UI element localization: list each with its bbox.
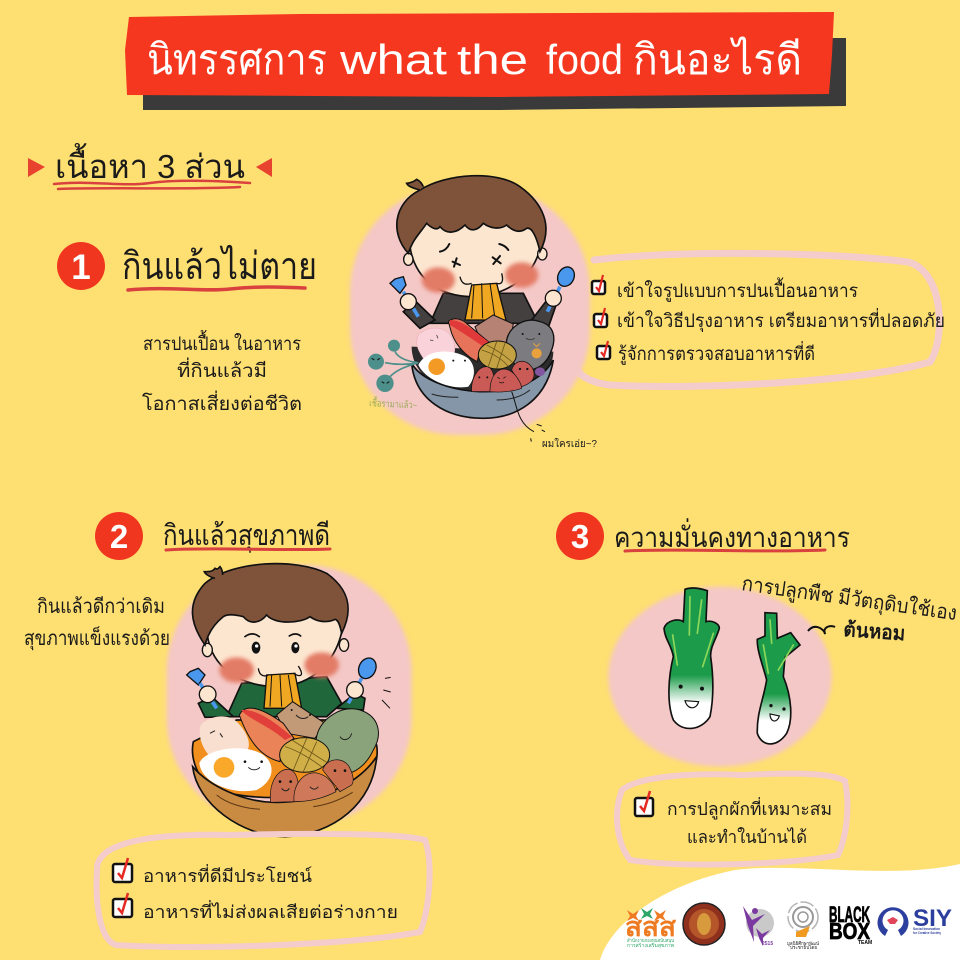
checklist: section 2 [113,858,398,922]
section 1 heading: กินแล้วไม่ตาย [122,245,317,288]
logo: black box team: BOX [829,918,871,944]
logo: black box team: TEAM [858,940,872,946]
checklist: section 3: และทำในบ้านได้ [687,827,807,847]
logo: foundation rings [787,902,819,950]
logo: SSS: สำนักงานกองทุนสนับสนุน [627,938,674,944]
heading: three parts [28,143,272,189]
label: spring onion: ต้นหอม [843,618,906,645]
section 3 heading [556,512,850,560]
label: fungus: เชื้อรามาแล้ว~ [369,396,418,412]
illustration: sick boy with bowl [350,176,590,442]
logo: black box team: BLACK [829,902,870,927]
title banner: กินอะไรดี [633,36,802,83]
section 2 heading: 2 [110,518,128,555]
section 3 heading: 3 [571,518,589,555]
item 3: รู้จักการตรวจสอบอาหารที่ดี [618,341,815,365]
panel: white corner with logos [600,864,960,960]
title banner [125,12,846,110]
title banner: what [339,36,447,83]
logo: foundation rings: ประชาธิปไตย [790,945,817,950]
illustration: spring onions [608,587,832,767]
title banner: food [546,36,623,83]
text: section 2 description: กินแล้วดีกว่าเดิม [37,596,165,618]
checklist: section 3 [635,791,832,847]
item 2: อาหารที่ไม่ส่งผลเสียต่อร่างกาย [143,900,398,922]
text: section 2 description: สุขภาพแข็งแรงด้วย [24,625,170,651]
panel: section 1 checklist outline [572,253,939,386]
logo: foundation rings: มูลนิธิศึกษาพัฒน์ [787,940,819,947]
panel: section 2 checklist outline [97,834,430,947]
logo: SIY: SIY [913,905,952,932]
item 1 [113,858,312,886]
logo: SIY: Social Innovation [913,927,940,931]
panel: section 3 checklist outline [617,774,847,865]
logo: SIY: for Creative Society [913,931,941,935]
title banner: นิทรรศการ [147,36,327,83]
item 1: อาหารที่ดีมีประโยชน์ [143,864,312,886]
section 1 heading: 1 [71,248,91,287]
logo: purple figures: 2515 [762,941,773,947]
logo: SSS: การสร้างเสริมสุขภาพ [627,942,674,949]
section 2 heading [95,512,330,560]
checklist: section 3: การปลูกผักที่เหมาะสม [667,797,832,820]
checklist: section 1 [592,275,945,365]
title banner: the [457,36,528,83]
logo: SIY [878,905,952,936]
text: section 1 description [142,330,302,415]
section 1 heading [57,242,317,290]
arrow: squiggle to onion [808,626,835,634]
text: section 2 description [24,596,170,651]
logo: purple figures [743,906,774,947]
text: section 1 description: ที่กินแล้วมี [177,357,267,382]
logo: SSS: สสส [625,912,677,942]
item 2: เข้าใจวิธีปรุงอาหาร เตรียมอาหารที่ปลอดภัย [617,308,945,333]
logo: black box team [829,902,872,946]
item 1 [592,275,858,302]
section 3 heading: ความมั่นคงทางอาหาร [614,518,850,553]
illustration: healthy boy with bowl [167,564,412,837]
text: section 1 description: โอกาสเสี่ยงต่อชีวิต [142,390,302,415]
item 2 [113,893,398,922]
label: who is it: ผมใครเอ่ย~? [542,438,597,450]
text: section 1 description: สารปนเปื้อน ในอาหาร [143,330,301,355]
section 2 heading: กินแล้วสุขภาพดี [163,520,330,553]
logo: university seal [683,903,725,945]
item 1: เข้าใจรูปแบบการปนเปื้อนอาหาร [617,277,858,302]
heading: three parts: เนื้อหา 3 ส่วน [55,143,245,185]
